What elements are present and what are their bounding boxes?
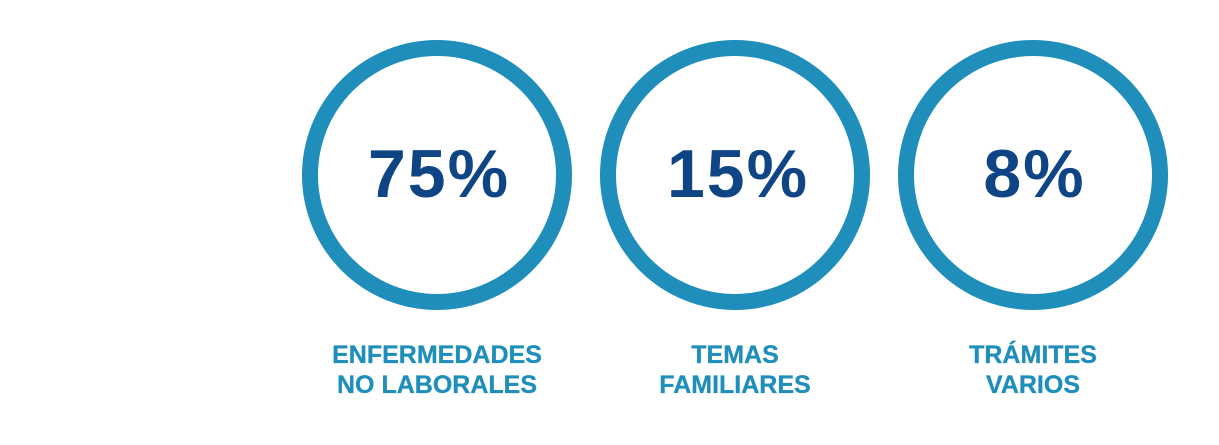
ring 8% (898, 40, 1168, 310)
label temas familiares (659, 341, 811, 399)
label enfermedades no laborales: NO LABORALES (337, 371, 537, 399)
label tramites varios (969, 340, 1097, 399)
percentage 75%: 75% (368, 136, 510, 212)
stat: temas familiares (600, 40, 870, 399)
ring 75% (302, 40, 572, 310)
label enfermedades no laborales: ENFERMEDADES (332, 341, 542, 369)
ring 15% (600, 40, 870, 310)
percentage 15%: 15% (667, 136, 809, 212)
percentage 8%: 8% (983, 136, 1086, 212)
label temas familiares: FAMILIARES (659, 371, 811, 399)
label tramites varios: VARIOS (986, 371, 1080, 399)
stat: tramites varios (898, 40, 1168, 399)
label enfermedades no laborales (332, 341, 542, 399)
label tramites varios: TRÁMITES (969, 341, 1097, 369)
stat: enfermedades no laborales (302, 40, 572, 399)
label temas familiares: TEMAS (691, 341, 779, 369)
